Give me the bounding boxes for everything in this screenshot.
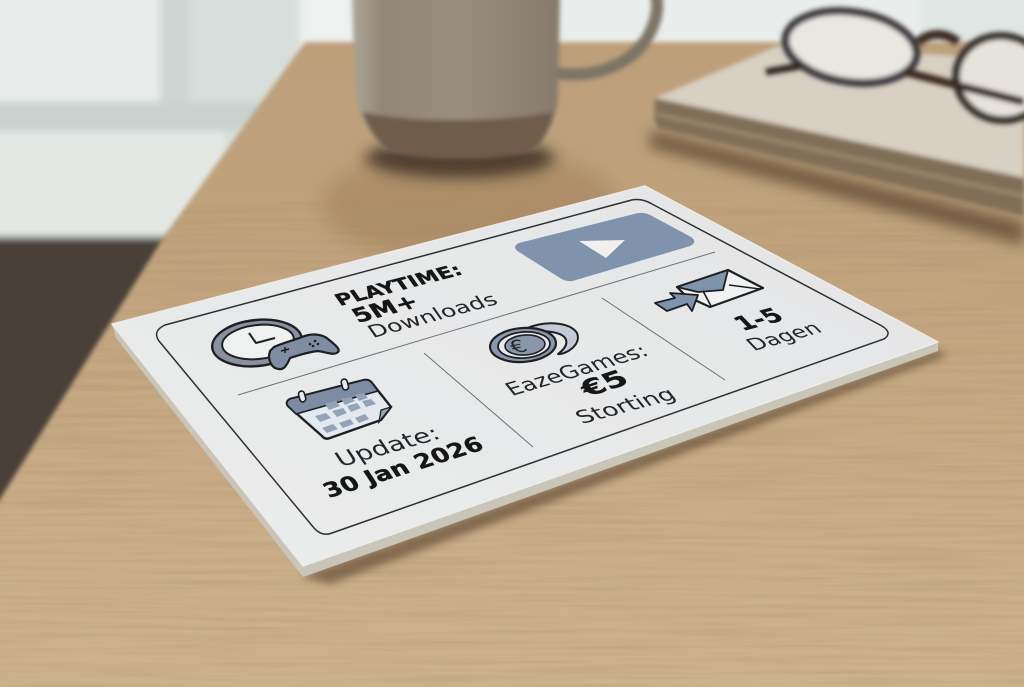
value 5M+: 5M+: [347, 291, 424, 328]
background: window and wall: [0, 0, 1024, 537]
value date: 30 Jan 2026: [319, 433, 489, 503]
play triangle: [579, 240, 625, 258]
label Downloads: Downloads: [363, 289, 502, 342]
text: update date: [319, 422, 489, 503]
arrow: [655, 293, 698, 311]
label EazeGames: EazeGames:: [501, 341, 653, 400]
value 1-5: 1-5: [728, 304, 790, 336]
icon: calendar: [287, 378, 391, 439]
label Update: Update:: [331, 422, 445, 472]
value euro 5: €5: [573, 365, 635, 403]
label PLAYTIME: PLAYTIME:: [331, 261, 467, 310]
icon: euro coins: €: [505, 336, 532, 358]
envelope: [677, 270, 763, 307]
play button panel: [515, 213, 694, 281]
label Storting: Storting: [571, 384, 681, 428]
clock: [210, 315, 304, 371]
heading: playtime: [331, 261, 502, 342]
inner border: [157, 200, 888, 534]
coffee mug: [352, 0, 657, 159]
info card: [112, 186, 946, 584]
label Dagen: Dagen: [742, 319, 827, 355]
text: delivery time: [728, 304, 827, 355]
notebook: [654, 45, 1024, 216]
card face: [112, 186, 938, 566]
card shadow: [300, 350, 946, 584]
card edge: [112, 324, 938, 577]
front coin: [489, 326, 557, 364]
icon: clock and game controller: [210, 315, 339, 371]
glasses: [766, 3, 1024, 127]
dividers: [238, 252, 725, 447]
text: deposit: [501, 341, 681, 428]
game controller: [269, 335, 339, 369]
back coin: [525, 323, 578, 354]
icon: euro coins: [489, 323, 578, 364]
icon: envelope with arrow: [655, 270, 763, 311]
